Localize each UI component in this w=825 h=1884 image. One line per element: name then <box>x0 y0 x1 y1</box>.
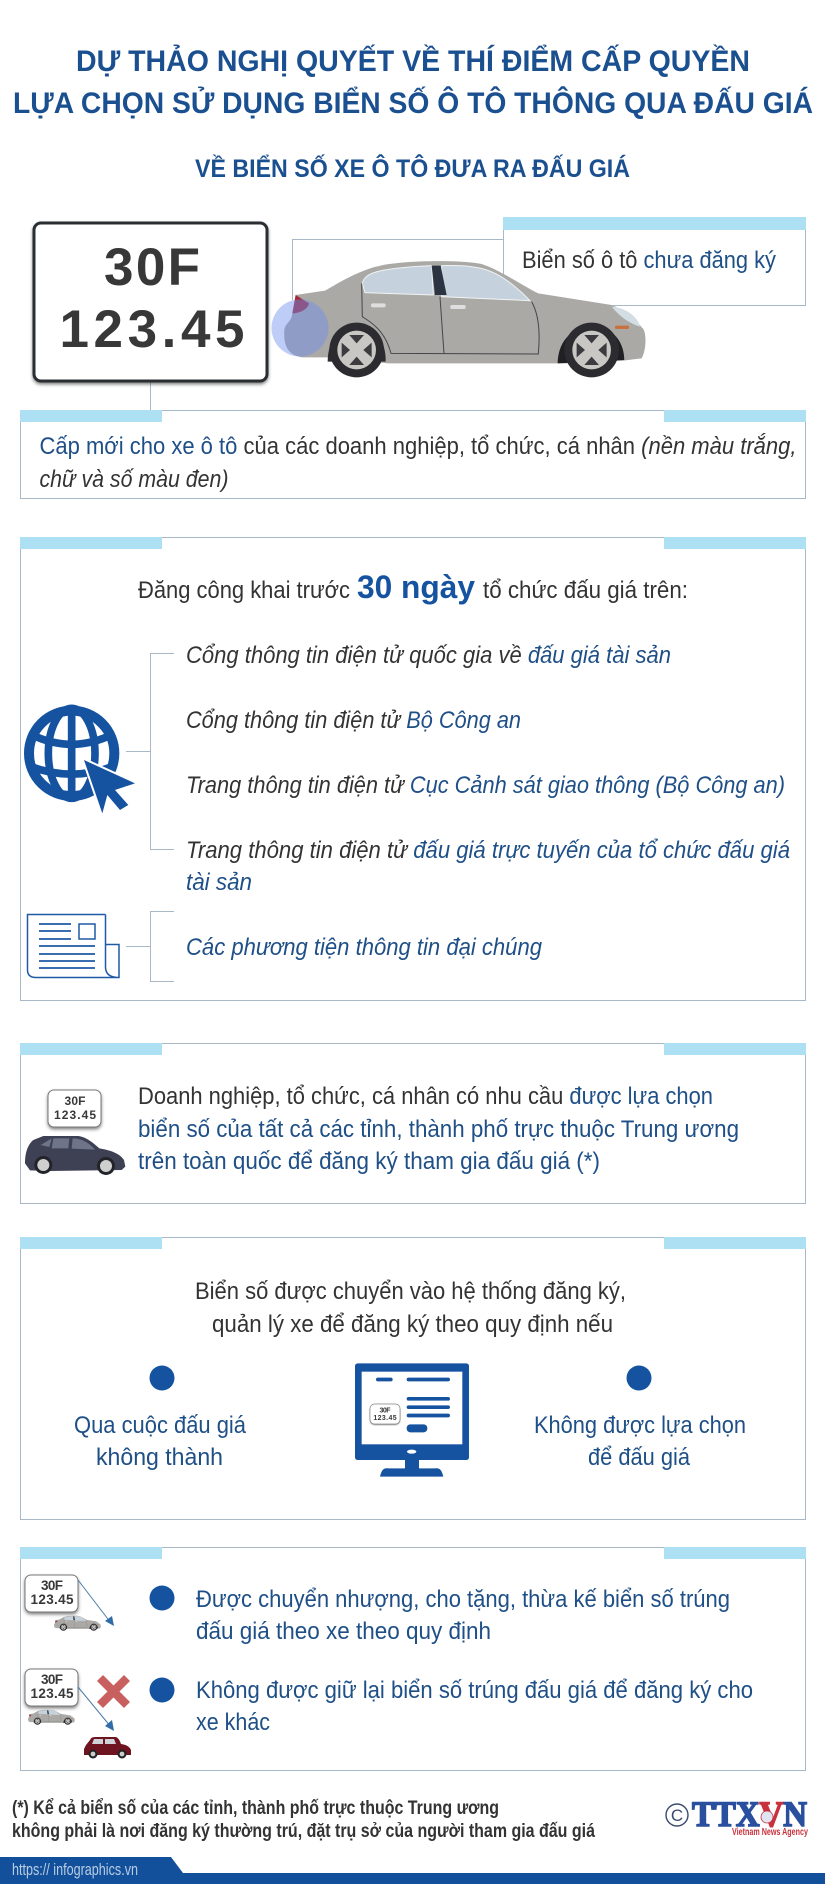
icon: plate cannot move to other car: 123.45 <box>30 1686 74 1701</box>
licence plate: 30F <box>104 238 200 297</box>
licence plate: 123.45 <box>60 300 244 359</box>
title: DỰ THẢO NGHỊ QUYẾT VỀ THÍ ĐIỂM CẤP QUYỀN <box>76 44 750 78</box>
logo: TTXVN: C <box>671 1806 683 1825</box>
licence plate <box>34 223 267 381</box>
participants text: biển số của tất cả các tỉnh, thành phố trực thuộc Trung ương <box>138 1116 739 1143</box>
icon: plate follows car: 123.45 <box>30 1592 74 1607</box>
connector: note to car <box>292 240 503 300</box>
panel: unregistered plate note <box>503 217 806 306</box>
rule: not allowed <box>150 1677 753 1736</box>
list of channels: Cổng thông tin điện tử quốc gia về đấu giá tài sản <box>186 642 671 669</box>
footer bar <box>0 1857 825 1884</box>
condition: not selected <box>534 1366 746 1471</box>
small plate: 30F <box>64 1094 86 1108</box>
icon: plate follows car <box>25 1575 114 1631</box>
icon: plate cannot move to other car: 30F <box>41 1672 63 1687</box>
announcement heading: tổ chức đấu giá trên: <box>483 577 688 604</box>
icon: plate follows car: 30F <box>41 1578 63 1593</box>
rule: allowed: Được chuyển nhượng, cho tặng, thừa kế biển số trúng <box>196 1586 730 1613</box>
condition: not selected: Không được lựa chọn <box>534 1412 746 1439</box>
announcement heading <box>138 569 688 605</box>
small plate <box>48 1090 101 1127</box>
list of channels: Cổng thông tin điện tử Bộ Công an <box>186 707 521 734</box>
subtitle: VỀ BIỂN SỐ XE Ô TÔ ĐƯA RA ĐẤU GIÁ <box>195 153 630 183</box>
car with highlighted plate area <box>272 261 646 377</box>
bracket: mass media <box>126 912 174 982</box>
panel: transfer rules <box>20 1547 806 1770</box>
icon: dark SUV <box>25 1136 125 1175</box>
rule: allowed: đấu giá theo xe theo quy định <box>196 1618 491 1645</box>
panel: transfer to registration system <box>20 1237 806 1520</box>
footnote: không phải là nơi đăng ký thường trú, đặt trụ sở của người tham gia đấu giá <box>12 1821 595 1842</box>
icon: monitor with plate: 30F <box>379 1408 391 1415</box>
list of channels <box>186 642 790 961</box>
panel: new plates <box>20 410 806 498</box>
rule: not allowed: Không được giữ lại biển số trúng đấu giá để đăng ký cho <box>196 1677 753 1704</box>
footnote: (*) Kể cả biển số của các tỉnh, thành phố trực thuộc Trung ương <box>12 1798 499 1819</box>
list of channels: Các phương tiện thông tin đại chúng <box>186 934 543 961</box>
panel: participants <box>20 1043 806 1204</box>
panel: new plates: chữ và số màu đen) <box>40 466 228 493</box>
rule: allowed <box>150 1586 730 1645</box>
panel: public announcement <box>20 537 806 1000</box>
rule: not allowed: xe khác <box>196 1709 270 1736</box>
bracket: online channels <box>126 654 174 850</box>
title <box>13 44 813 120</box>
condition: failed auction: không thành <box>96 1444 223 1471</box>
icon: newspaper <box>28 914 119 978</box>
participants text <box>138 1083 739 1175</box>
connector: plate to panel <box>150 382 152 410</box>
footnote <box>12 1798 595 1842</box>
panel heading: quản lý xe để đăng ký theo quy định nếu <box>212 1311 613 1338</box>
announcement heading: 30 ngày <box>357 569 475 605</box>
icon: plate cannot move to other car <box>25 1669 131 1758</box>
condition: not selected: để đấu giá <box>588 1444 691 1471</box>
small plate: 123.45 <box>54 1108 96 1122</box>
icon: globe with cursor <box>29 708 135 813</box>
condition: failed auction <box>74 1366 247 1471</box>
footer bar: https:// infographics.vn <box>12 1860 138 1879</box>
condition: failed auction: Qua cuộc đấu giá <box>74 1412 247 1439</box>
icon: monitor with plate: 123.45 <box>373 1415 397 1422</box>
list of channels: Trang thông tin điện tử đấu giá trực tuyến của tổ chức đấu giá <box>186 837 790 864</box>
list of channels: Trang thông tin điện tử Cục Cảnh sát giao thông (Bộ Công an) <box>186 772 785 799</box>
panel: unregistered plate note: Biển số ô tô chưa đăng ký <box>522 247 776 274</box>
panel heading: Biển số được chuyển vào hệ thống đăng ký, <box>195 1278 626 1305</box>
logo: TTXVN: TTXVN <box>692 1794 807 1834</box>
icon: monitor with plate <box>355 1363 469 1477</box>
panel heading <box>195 1278 626 1338</box>
participants text: Doanh nghiệp, tổ chức, cá nhân có nhu cầu được lựa chọn <box>138 1083 713 1110</box>
panel: new plates: Cấp mới cho xe ô tô của các doanh nghiệp, tổ chức, cá nhân (nền màu trắng, <box>40 433 796 460</box>
announcement heading: Đăng công khai trước <box>138 577 350 604</box>
list of channels: tài sản <box>186 869 252 896</box>
participants text: trên toàn quốc để đăng ký tham gia đấu giá (*) <box>138 1148 600 1175</box>
